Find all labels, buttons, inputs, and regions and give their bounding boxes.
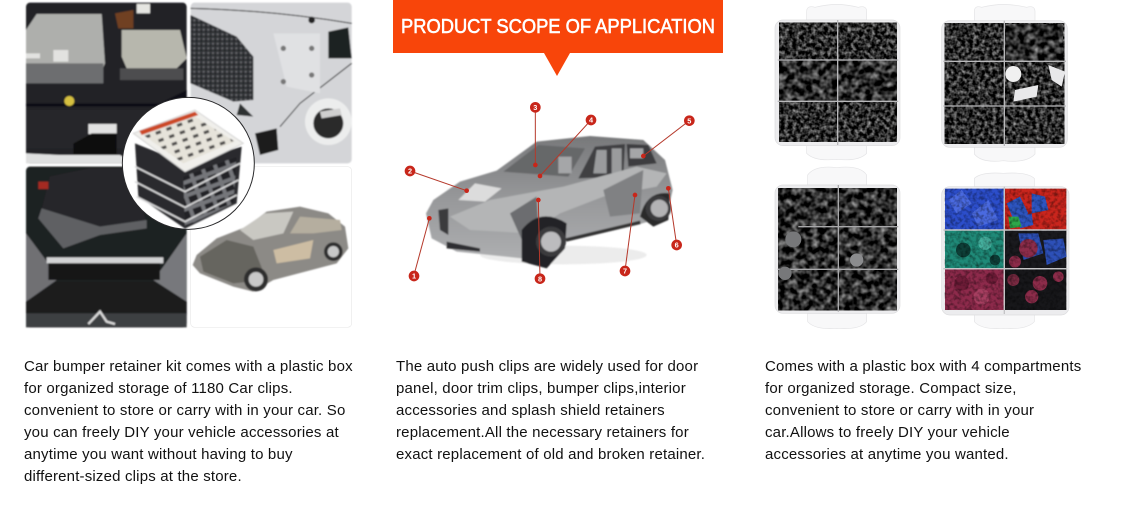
callout numbers: 1 bbox=[412, 272, 416, 281]
photo: open engine and trunk bbox=[26, 167, 187, 327]
box: bottom right, coloured clips bbox=[942, 173, 1069, 329]
heading banner: product scope bbox=[393, 0, 723, 76]
panel: car collage bbox=[26, 3, 352, 327]
callout numbers: 8 bbox=[538, 274, 542, 283]
text block: application description bbox=[396, 358, 705, 463]
text block: storage description: different-sized clips at the store. bbox=[24, 468, 242, 485]
text block: application description: panel, door trim clips, bumper clips,interior bbox=[396, 380, 686, 397]
banner pointer bbox=[544, 53, 570, 76]
text block: storage description: Car bumper retainer kit comes with a plastic box bbox=[24, 358, 353, 375]
box: bottom left bbox=[775, 167, 900, 329]
text block: compartments description: for organized storage. Compact size, bbox=[765, 380, 1017, 397]
text block: compartments description: accessories at anytime you wanted. bbox=[765, 446, 1009, 463]
callout numbers: 6 bbox=[675, 241, 679, 250]
text block: storage description: for organized storage of 1180 Car clips. bbox=[24, 380, 293, 397]
callout numbers: 4 bbox=[589, 116, 594, 125]
text block: compartments description: car.Allows to freely DIY your vehicle bbox=[765, 424, 1010, 441]
panel: four clip organiser boxes bbox=[775, 4, 1069, 329]
text block: compartments description bbox=[765, 358, 1081, 463]
text block: application description: accessories and splash shield retainers bbox=[396, 402, 665, 419]
text block: storage description: you can freely DIY your vehicle accessories at bbox=[24, 424, 339, 441]
callout lines bbox=[410, 107, 689, 278]
callout numbers: 7 bbox=[623, 267, 627, 276]
callout numbers: 3 bbox=[533, 103, 537, 112]
text block: storage description: convenient to store or carry with in your car. So bbox=[24, 402, 345, 419]
text block: application description: exact replacement of old and broken retainer. bbox=[396, 446, 705, 463]
callout numbers: 5 bbox=[687, 116, 691, 125]
inset circle: stacked storage box bbox=[122, 97, 254, 229]
callout numbers: 2 bbox=[408, 167, 412, 176]
text block: compartments description: convenient to store or carry with in your bbox=[765, 402, 1034, 419]
text block: storage description bbox=[24, 358, 353, 485]
photo: door panel with foil insulation bbox=[191, 3, 352, 163]
box: top right bbox=[942, 4, 1067, 161]
box: top left bbox=[775, 4, 900, 160]
photo: cutaway car on white bbox=[191, 167, 352, 327]
car body bbox=[426, 136, 673, 268]
text block: application description: replacement.All the necessary retainers for bbox=[396, 424, 689, 441]
banner title: PRODUCT SCOPE OF APPLICATION bbox=[401, 15, 715, 38]
text block: storage description: anytime you want without having to buy bbox=[24, 446, 293, 463]
text block: compartments description: Comes with a plastic box with 4 compartments bbox=[765, 358, 1081, 375]
photo: engine bay with silver modules bbox=[26, 3, 187, 163]
text block: application description: The auto push clips are widely used for door bbox=[396, 358, 698, 375]
diagram: car with numbered callouts bbox=[405, 102, 695, 284]
callout numbers bbox=[405, 102, 695, 284]
